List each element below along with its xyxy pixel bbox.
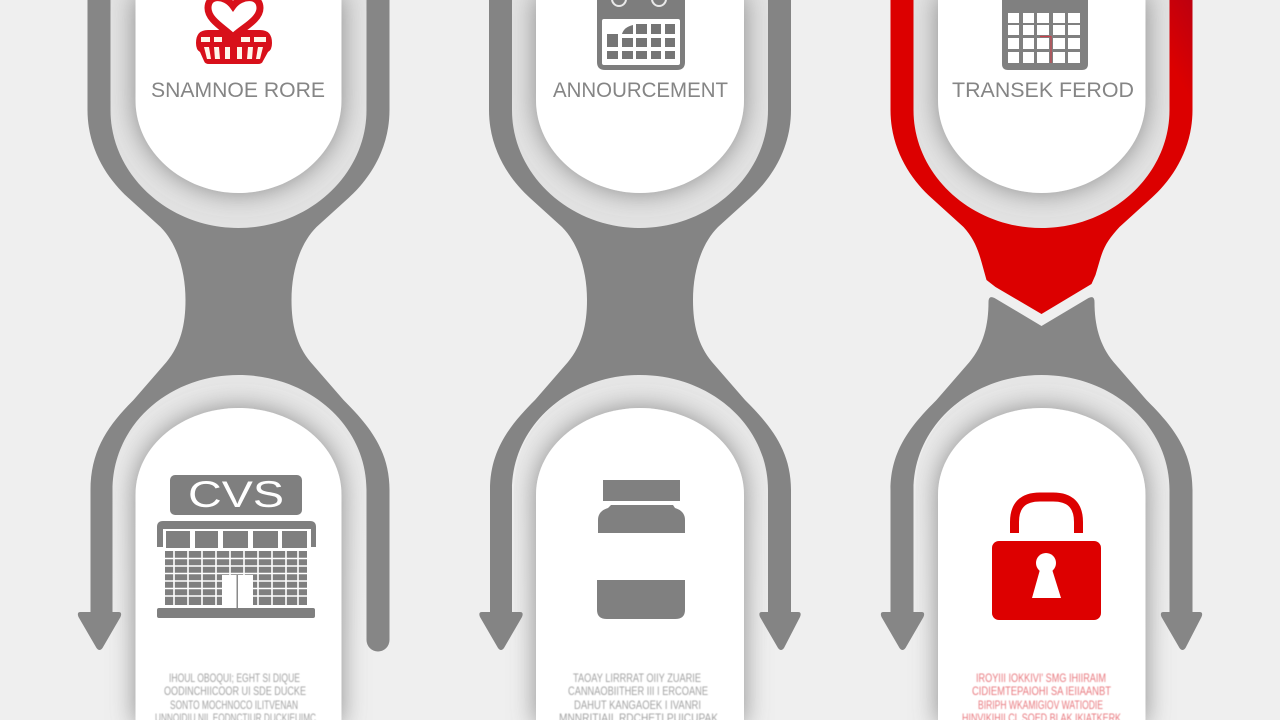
panel: column 3 shapes bbox=[881, 0, 1202, 720]
heading: ANNOURCEMENT bbox=[553, 79, 728, 102]
panel: column 1 shapes bbox=[78, 0, 390, 720]
heading: SNAMNOE RORE bbox=[151, 79, 325, 102]
text block: OODINCHIICOOR UI SDE DUCKE bbox=[164, 684, 306, 698]
panel: column 1 bbox=[78, 0, 390, 720]
icon: transfer calendar bbox=[1002, 0, 1088, 70]
icon: padlock bbox=[992, 497, 1101, 620]
text block: CIDIEMTEPAIOHI SA IEIIAANBT bbox=[972, 684, 1112, 698]
icon: CVS store bbox=[157, 474, 316, 618]
text block: IHOUL OBOQUI; EGHT SI DIQUE bbox=[169, 671, 300, 685]
panel: column 2 shapes bbox=[479, 0, 801, 720]
icon: heart basket bbox=[196, 0, 272, 64]
red connector bbox=[890, 0, 1192, 314]
text block: IROYIII IOKKIVI' SMG IHIIRAIM bbox=[976, 671, 1106, 685]
icon: jar bbox=[597, 480, 685, 619]
text block: TAOAY LIRRRAT OIIY ZUARIE bbox=[573, 671, 701, 685]
text block: SONTO MOCHNOCO ILITVENAN bbox=[170, 698, 298, 712]
text block bbox=[962, 671, 1121, 720]
text block: CANNAOBIITHER III I ERCOANE bbox=[568, 684, 708, 698]
icon: CVS store: CVS bbox=[188, 474, 284, 515]
panel: column 2 bbox=[479, 0, 801, 720]
icon: announcement calendar bbox=[597, 0, 685, 70]
grey arrows bbox=[881, 297, 1202, 650]
text block: BIRIPH WKAMIGIOV WATIODIE bbox=[978, 698, 1103, 712]
text block bbox=[155, 671, 316, 720]
panel: column 3 bbox=[881, 0, 1202, 720]
heading: TRANSEK FEROD bbox=[952, 79, 1134, 102]
text block: DAHUT KANGAOEK I IVANRI bbox=[574, 698, 701, 712]
text block bbox=[559, 671, 718, 720]
